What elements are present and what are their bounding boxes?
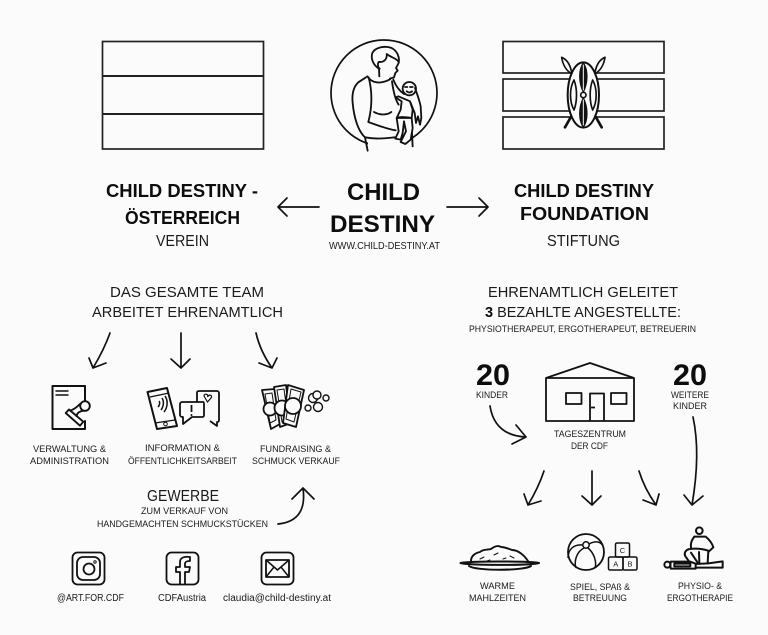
- arrow: to therapy: [639, 471, 659, 505]
- labels: left column activities: INFORMATION &: [145, 443, 221, 454]
- arrow: to administration: [89, 333, 110, 368]
- text: team works voluntarily: DAS GESAMTE TEAM: [110, 284, 264, 301]
- icon: day centre building: [546, 363, 634, 421]
- icon: warm meal on plate: [460, 546, 539, 570]
- text: Gewerbe: ZUM VERKAUF VON: [141, 506, 228, 517]
- labels: right column services: PHYSIO- &: [678, 581, 723, 592]
- heading: Child Destiny Österreich: ÖSTERREICH: [125, 207, 240, 228]
- text: 20 weitere Kinder: 20: [673, 359, 707, 392]
- label: day centre: TAGESZENTRUM: [554, 429, 626, 440]
- heading: Child Destiny Foundation: STIFTUNG: [547, 233, 620, 250]
- labels: right column services: ERGOTHERAPIE: [667, 593, 733, 604]
- icon: Instagram: [72, 552, 104, 584]
- arrow: to meals: [524, 471, 544, 505]
- labels: right column services: BETREUUNG: [573, 593, 627, 604]
- heading: Child Destiny centre: WWW.CHILD-DESTINY.AT: [329, 241, 440, 252]
- icon: Facebook: [166, 552, 198, 585]
- labels: left column activities: ÖFFENTLICHKEITSARBEIT: [128, 456, 237, 467]
- label: day centre: [554, 429, 626, 452]
- text: Gewerbe: [97, 488, 268, 530]
- labels: right column services: MAHLZEITEN: [469, 593, 526, 604]
- text: 20 weitere Kinder: [671, 359, 709, 412]
- text: team works voluntarily: ARBEITET EHRENAMTLICH: [92, 304, 283, 321]
- flag: Austria outline: [102, 42, 264, 149]
- icon: phone and speech bubbles: [148, 388, 219, 429]
- heading: Child Destiny Foundation: CHILD DESTINY: [514, 180, 655, 201]
- text: voluntary lead and paid staff: EHRENAMTLICH GELEITET: [488, 284, 678, 301]
- text: 20 Kinder: 20: [476, 359, 510, 392]
- labels: contact handles: @ART.FOR.CDF: [57, 593, 124, 604]
- text: 20 weitere Kinder: WEITERE: [671, 390, 709, 401]
- arrow: Gewerbe up to fundraising: [278, 488, 314, 524]
- heading: Child Destiny Österreich: CHILD DESTINY -: [106, 180, 258, 201]
- labels: contact handles: CDFAustria: [158, 593, 206, 604]
- arrow: to information: [171, 333, 190, 368]
- text: voluntary lead and paid staff: [469, 284, 696, 335]
- flag: Kenya with Maasai shield: [503, 42, 664, 149]
- arrow: children into day centre: [490, 406, 526, 444]
- labels: right column services: WARME: [480, 581, 515, 592]
- text: voluntary lead and paid staff: 3 BEZAHLTE ANGESTELLTE:: [485, 304, 681, 321]
- labels: left column activities: ADMINISTRATION: [30, 456, 109, 467]
- heading: Child Destiny Foundation: FOUNDATION: [520, 203, 649, 224]
- label: day centre: DER CDF: [571, 441, 608, 452]
- icon: ball and alphabet blocks: B: [627, 560, 633, 568]
- icon: mail: [262, 552, 294, 584]
- text: team works voluntarily: [92, 284, 283, 321]
- heading: Child Destiny Österreich: VEREIN: [156, 233, 209, 250]
- text: 20 Kinder: KINDER: [476, 390, 508, 401]
- heading: Child Destiny Österreich: [106, 180, 258, 250]
- icon: ball and alphabet blocks: [568, 534, 637, 570]
- heading: Child Destiny centre: CHILD: [347, 179, 420, 206]
- arrow: to play: [582, 471, 601, 505]
- labels: left column activities: SCHMUCK VERKAUF: [252, 456, 340, 467]
- arrow: centre to Verein: [278, 198, 319, 216]
- arrow: to fundraising: [256, 333, 277, 368]
- icon: document with stamp: [52, 386, 90, 429]
- logo: parent holding baby in a circle: [331, 40, 437, 153]
- labels: left column activities: FUNDRAISING &: [260, 444, 332, 455]
- text: Gewerbe: HANDGEMACHTEN SCHMUCKSTÜCKEN: [97, 519, 268, 530]
- labels: left column activities: [30, 443, 340, 467]
- arrow: further children to therapy: [684, 417, 703, 505]
- text: 20 weitere Kinder: KINDER: [673, 401, 707, 412]
- heading: Child Destiny centre: DESTINY: [330, 211, 435, 238]
- icon: physiotherapist with patient: [664, 527, 723, 569]
- text: voluntary lead and paid staff: PHYSIOTHERAPEUT, ERGOTHERAPEUT, BETREUERIN: [469, 324, 696, 335]
- text: Gewerbe: GEWERBE: [147, 488, 219, 505]
- labels: right column services: SPIEL, SPAß &: [570, 582, 631, 593]
- labels: left column activities: VERWALTUNG &: [33, 444, 107, 455]
- icon: ball and alphabet blocks: C: [620, 546, 626, 555]
- icon: ball and alphabet blocks: A: [613, 560, 618, 568]
- icon: banknotes and coins: [262, 385, 329, 429]
- heading: Child Destiny centre: [329, 179, 440, 252]
- heading: Child Destiny Foundation: [514, 180, 655, 250]
- labels: contact handles: claudia@child-destiny.at: [223, 593, 331, 604]
- arrow: centre to Stiftung: [447, 198, 488, 216]
- labels: right column services: [469, 581, 733, 604]
- labels: contact handles: [57, 593, 331, 604]
